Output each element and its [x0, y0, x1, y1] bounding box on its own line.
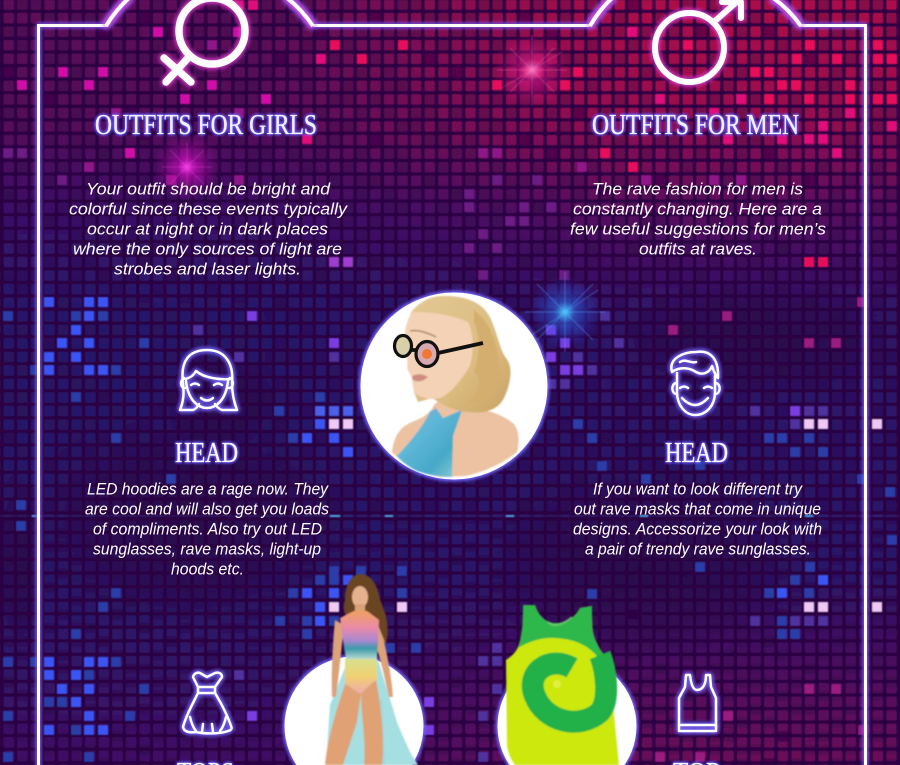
- text: men head advice: [573, 480, 822, 558]
- text: girls intro: occur at night or in dark places: [87, 220, 329, 238]
- text: girls head advice: sunglasses, rave masks, light-up: [93, 540, 321, 558]
- text: girls head advice: [85, 480, 330, 578]
- text: girls intro: Your outfit should be bright and: [86, 180, 331, 198]
- text: girls head advice: hoods etc.: [171, 560, 244, 578]
- arms: [332, 620, 344, 697]
- text: men head advice: If you want to look different try: [593, 480, 804, 498]
- text: men head advice: designs. Accessorize your look with: [573, 520, 822, 538]
- text: men intro: constantly changing. Here are a: [573, 200, 822, 218]
- hair front strand: [468, 310, 500, 402]
- hair: [344, 574, 388, 643]
- photo: woman in rainbow outfit and long skirt: [286, 574, 422, 765]
- photo: tie-dye tank top: [498, 605, 636, 765]
- face and neck: [352, 586, 368, 608]
- text: girls head advice: LED hoodies are a rage now. They: [87, 480, 329, 498]
- lips and brow: [412, 374, 428, 381]
- label: head (girls): HEAD: [175, 437, 238, 469]
- bottoms: [345, 659, 377, 694]
- label: head (men): HEAD: [665, 437, 728, 469]
- heading: outfits for men: OUTFITS FOR MEN: [592, 110, 799, 141]
- face: [405, 312, 473, 399]
- photo: woman with kaleidoscope glasses: [362, 294, 546, 478]
- icon: female symbol: [164, 0, 245, 82]
- text: men intro: [570, 180, 827, 258]
- sparkle: pink: [494, 32, 570, 108]
- text: men intro: outfits at raves.: [639, 240, 757, 258]
- halter top: [397, 408, 462, 477]
- glasses: [394, 336, 483, 366]
- legs: [325, 684, 361, 765]
- icon: man head: [671, 352, 720, 415]
- bodice: [340, 611, 379, 659]
- text: girls intro: strobes and laser lights.: [114, 260, 301, 278]
- text: girls intro: where the only sources of light are: [73, 240, 342, 258]
- text: girls head advice: are cool and will also get you loads: [85, 500, 330, 518]
- text: men intro: The rave fashion for men is: [592, 180, 804, 198]
- shoulders: [392, 392, 519, 477]
- heading: outfits for girls: OUTFITS FOR GIRLS: [95, 110, 317, 141]
- text: girls intro: colorful since these events typically: [69, 200, 349, 218]
- icon: tank top: [679, 675, 716, 731]
- icon: dress: [183, 673, 232, 733]
- sparkle: blue: [525, 272, 605, 352]
- text: girls head advice: of compliments. Also try out LED: [93, 520, 322, 538]
- sparkle: magenta: [153, 133, 221, 201]
- icon: woman head: [180, 350, 237, 410]
- icon: male symbol: [655, 0, 741, 82]
- text: girls intro: [69, 180, 349, 278]
- text: men intro: few useful suggestions for men’s: [570, 220, 827, 238]
- hair: [410, 296, 510, 412]
- text: men head advice: a pair of trendy rave sunglasses.: [585, 540, 811, 558]
- text: men head advice: out rave masks that come in unique: [574, 500, 821, 518]
- sheer skirt: [326, 660, 418, 765]
